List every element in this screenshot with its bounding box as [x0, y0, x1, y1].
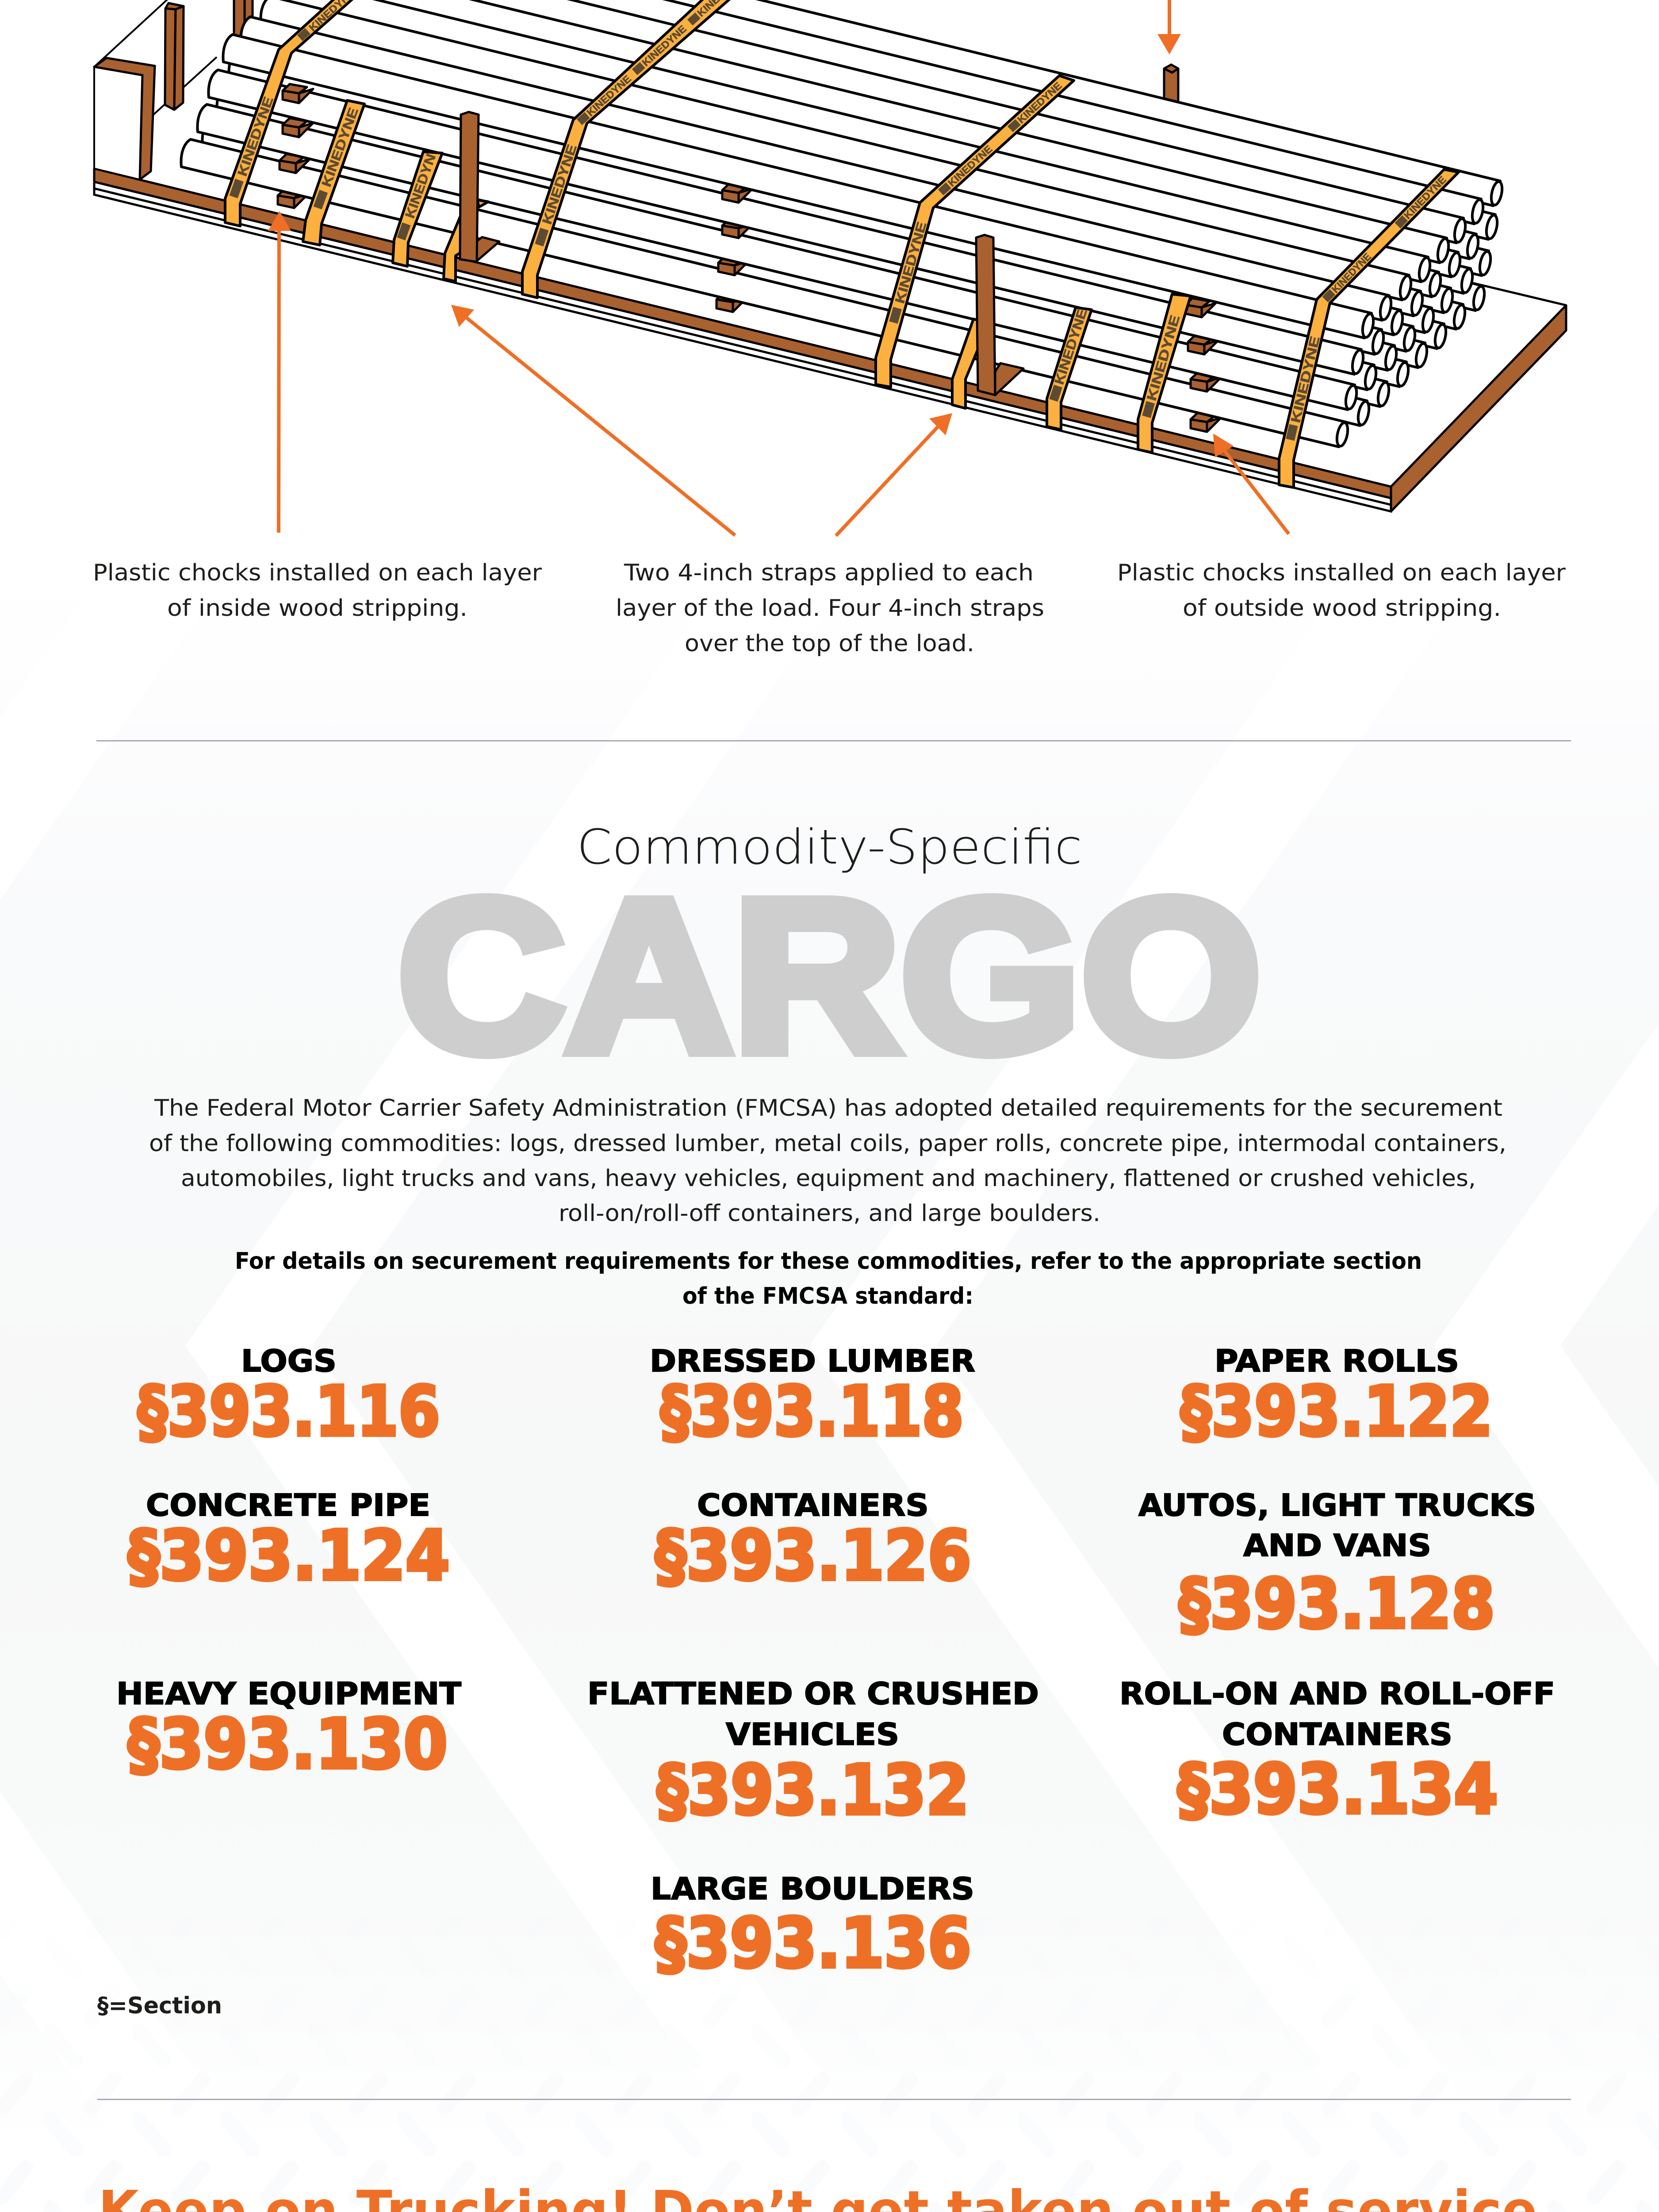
section: roll-on and roll-off containers	[1119, 1676, 1555, 1829]
section: dressed lumber: §393.118	[660, 1371, 964, 1452]
arrow: strap left	[451, 305, 735, 535]
wood chocks, third row	[280, 154, 1221, 392]
section: paper rolls	[1180, 1344, 1493, 1452]
section: logs	[138, 1344, 440, 1452]
section: dressed lumber	[650, 1344, 975, 1452]
rear wall and posts	[94, 0, 1178, 180]
section: dressed lumber: DRESSED LUMBER	[650, 1344, 975, 1379]
strap branding	[230, 0, 1448, 441]
strap branding: KINEDYNE	[584, 73, 633, 119]
caption: outside wood stripping	[1117, 560, 1566, 622]
section: autos, light trucks and vans	[1138, 1488, 1536, 1644]
caption: outside wood stripping: Plastic chocks installed on each layer	[1117, 560, 1566, 586]
strap branding: KINEDYNE	[946, 143, 994, 189]
section: autos, light trucks and vans: §393.128	[1179, 1564, 1495, 1644]
strap branding: KINEDYN	[402, 152, 439, 220]
wood chocks, lowest row	[278, 189, 1221, 432]
strap branding: KINEDYNE	[1402, 174, 1448, 221]
pipes: bottom layer	[181, 3, 1486, 447]
bold instruction: For details on securement requirements for these commodities, refer to the appropriate section	[235, 1248, 1422, 1275]
strap branding: KINEDYNE	[235, 95, 276, 178]
strap branding: KINEDYNE	[1052, 307, 1090, 386]
strap branding: KINEDYNE	[1144, 314, 1183, 403]
intro paragraph: The Federal Motor Carrier Safety Administration (FMCSA) has adopted detailed requirements for the securement	[154, 1095, 1502, 1121]
strap branding: KINEDYNE	[893, 220, 930, 305]
section: paper rolls: §393.122	[1180, 1371, 1493, 1452]
intro paragraph	[149, 1095, 1506, 1227]
section: heavy equipment: §393.130	[128, 1704, 448, 1784]
footnote: §=Section	[97, 1993, 222, 2019]
wood chocks, top row	[283, 84, 1216, 317]
arrow: strap right	[836, 413, 952, 536]
intro paragraph: of the following commodities: logs, dressed lumber, metal coils, paper rolls, concrete pipe, intermodal containers,	[149, 1130, 1506, 1157]
strap branding: KINEDYNE	[1015, 80, 1064, 126]
caption: straps: over the top of the load.	[685, 630, 974, 657]
section: containers: §393.126	[655, 1516, 971, 1596]
caption: inside wood stripping: of inside wood stripping.	[167, 595, 467, 622]
pipes: second layer	[208, 0, 1499, 375]
bold instruction: of the FMCSA standard:	[682, 1283, 973, 1310]
section: containers	[655, 1488, 971, 1596]
front posts	[460, 112, 1023, 395]
caption: inside wood stripping	[93, 560, 542, 622]
bold instruction	[235, 1248, 1422, 1310]
pipes: top layer	[223, 0, 1504, 338]
section: flattened or crushed vehicles: VEHICLES	[726, 1717, 899, 1752]
section: concrete pipe: §393.124	[128, 1516, 450, 1596]
caption: outside wood stripping: of outside wood stripping.	[1183, 595, 1501, 622]
section: flattened or crushed vehicles	[587, 1676, 1039, 1830]
section: roll-on and roll-off containers: §393.134	[1177, 1749, 1498, 1829]
section: large boulders: §393.136	[655, 1903, 971, 1983]
section: logs: LOGS	[241, 1344, 337, 1379]
section: autos, light trucks and vans: AUTOS, LIGHT TRUCKS	[1138, 1488, 1536, 1523]
section: heavy equipment	[116, 1676, 461, 1784]
section: flattened or crushed vehicles: §393.132	[657, 1750, 969, 1830]
intro paragraph: automobiles, light trucks and vans, heavy vehicles, equipment and machinery, flattened or crushed vehicles,	[181, 1165, 1476, 1192]
strap branding: KINEDYNE	[319, 106, 361, 189]
strap branding: KINEDYNE	[1288, 335, 1323, 424]
caption: straps	[616, 560, 1044, 657]
flatbed deck	[94, 57, 1566, 511]
arrow: inside chocks	[268, 211, 291, 533]
pipes: third layer	[197, 0, 1492, 410]
strap branding: KINEDYNE	[540, 143, 580, 226]
caption: straps: layer of the load. Four 4-inch straps	[616, 595, 1044, 622]
strap branding: KINEDYNE	[640, 23, 689, 69]
background: chevron and tread-plate pattern	[0, 549, 1659, 2212]
section: roll-on and roll-off containers: CONTAINERS	[1222, 1717, 1452, 1752]
wood chocks, second row	[283, 118, 1218, 354]
section: large boulders: LARGE BOULDERS	[651, 1871, 974, 1907]
section: logs: §393.116	[138, 1371, 440, 1452]
section: paper rolls: PAPER ROLLS	[1215, 1344, 1459, 1379]
heading: CARGO: CARGO	[398, 854, 1261, 1097]
caption: straps: Two 4-inch straps applied to each	[624, 560, 1034, 586]
strap branding: KINEDYNE	[1329, 251, 1373, 295]
section: heavy equipment: HEAVY EQUIPMENT	[116, 1676, 461, 1712]
section: autos, light trucks and vans: AND VANS	[1243, 1528, 1431, 1563]
section: containers: CONTAINERS	[697, 1488, 929, 1523]
heading: Commodity-Specific: Commodity-Specific	[577, 820, 1082, 875]
cargo straps	[225, 0, 1459, 488]
section: large boulders	[651, 1871, 974, 1983]
illustration: pipe load secured on flatbed	[94, 0, 1566, 511]
arrow: outside chocks	[1213, 434, 1289, 534]
caption: inside wood stripping: Plastic chocks installed on each layer	[93, 560, 542, 586]
arrow: top post	[1157, 0, 1181, 54]
section: concrete pipe: CONCRETE PIPE	[146, 1488, 430, 1523]
intro paragraph: roll-on/roll-off containers, and large boulders.	[559, 1200, 1100, 1227]
section: roll-on and roll-off containers: ROLL-ON AND ROLL-OFF	[1119, 1676, 1555, 1712]
section: flattened or crushed vehicles: FLATTENED OR CRUSHED	[587, 1676, 1039, 1712]
